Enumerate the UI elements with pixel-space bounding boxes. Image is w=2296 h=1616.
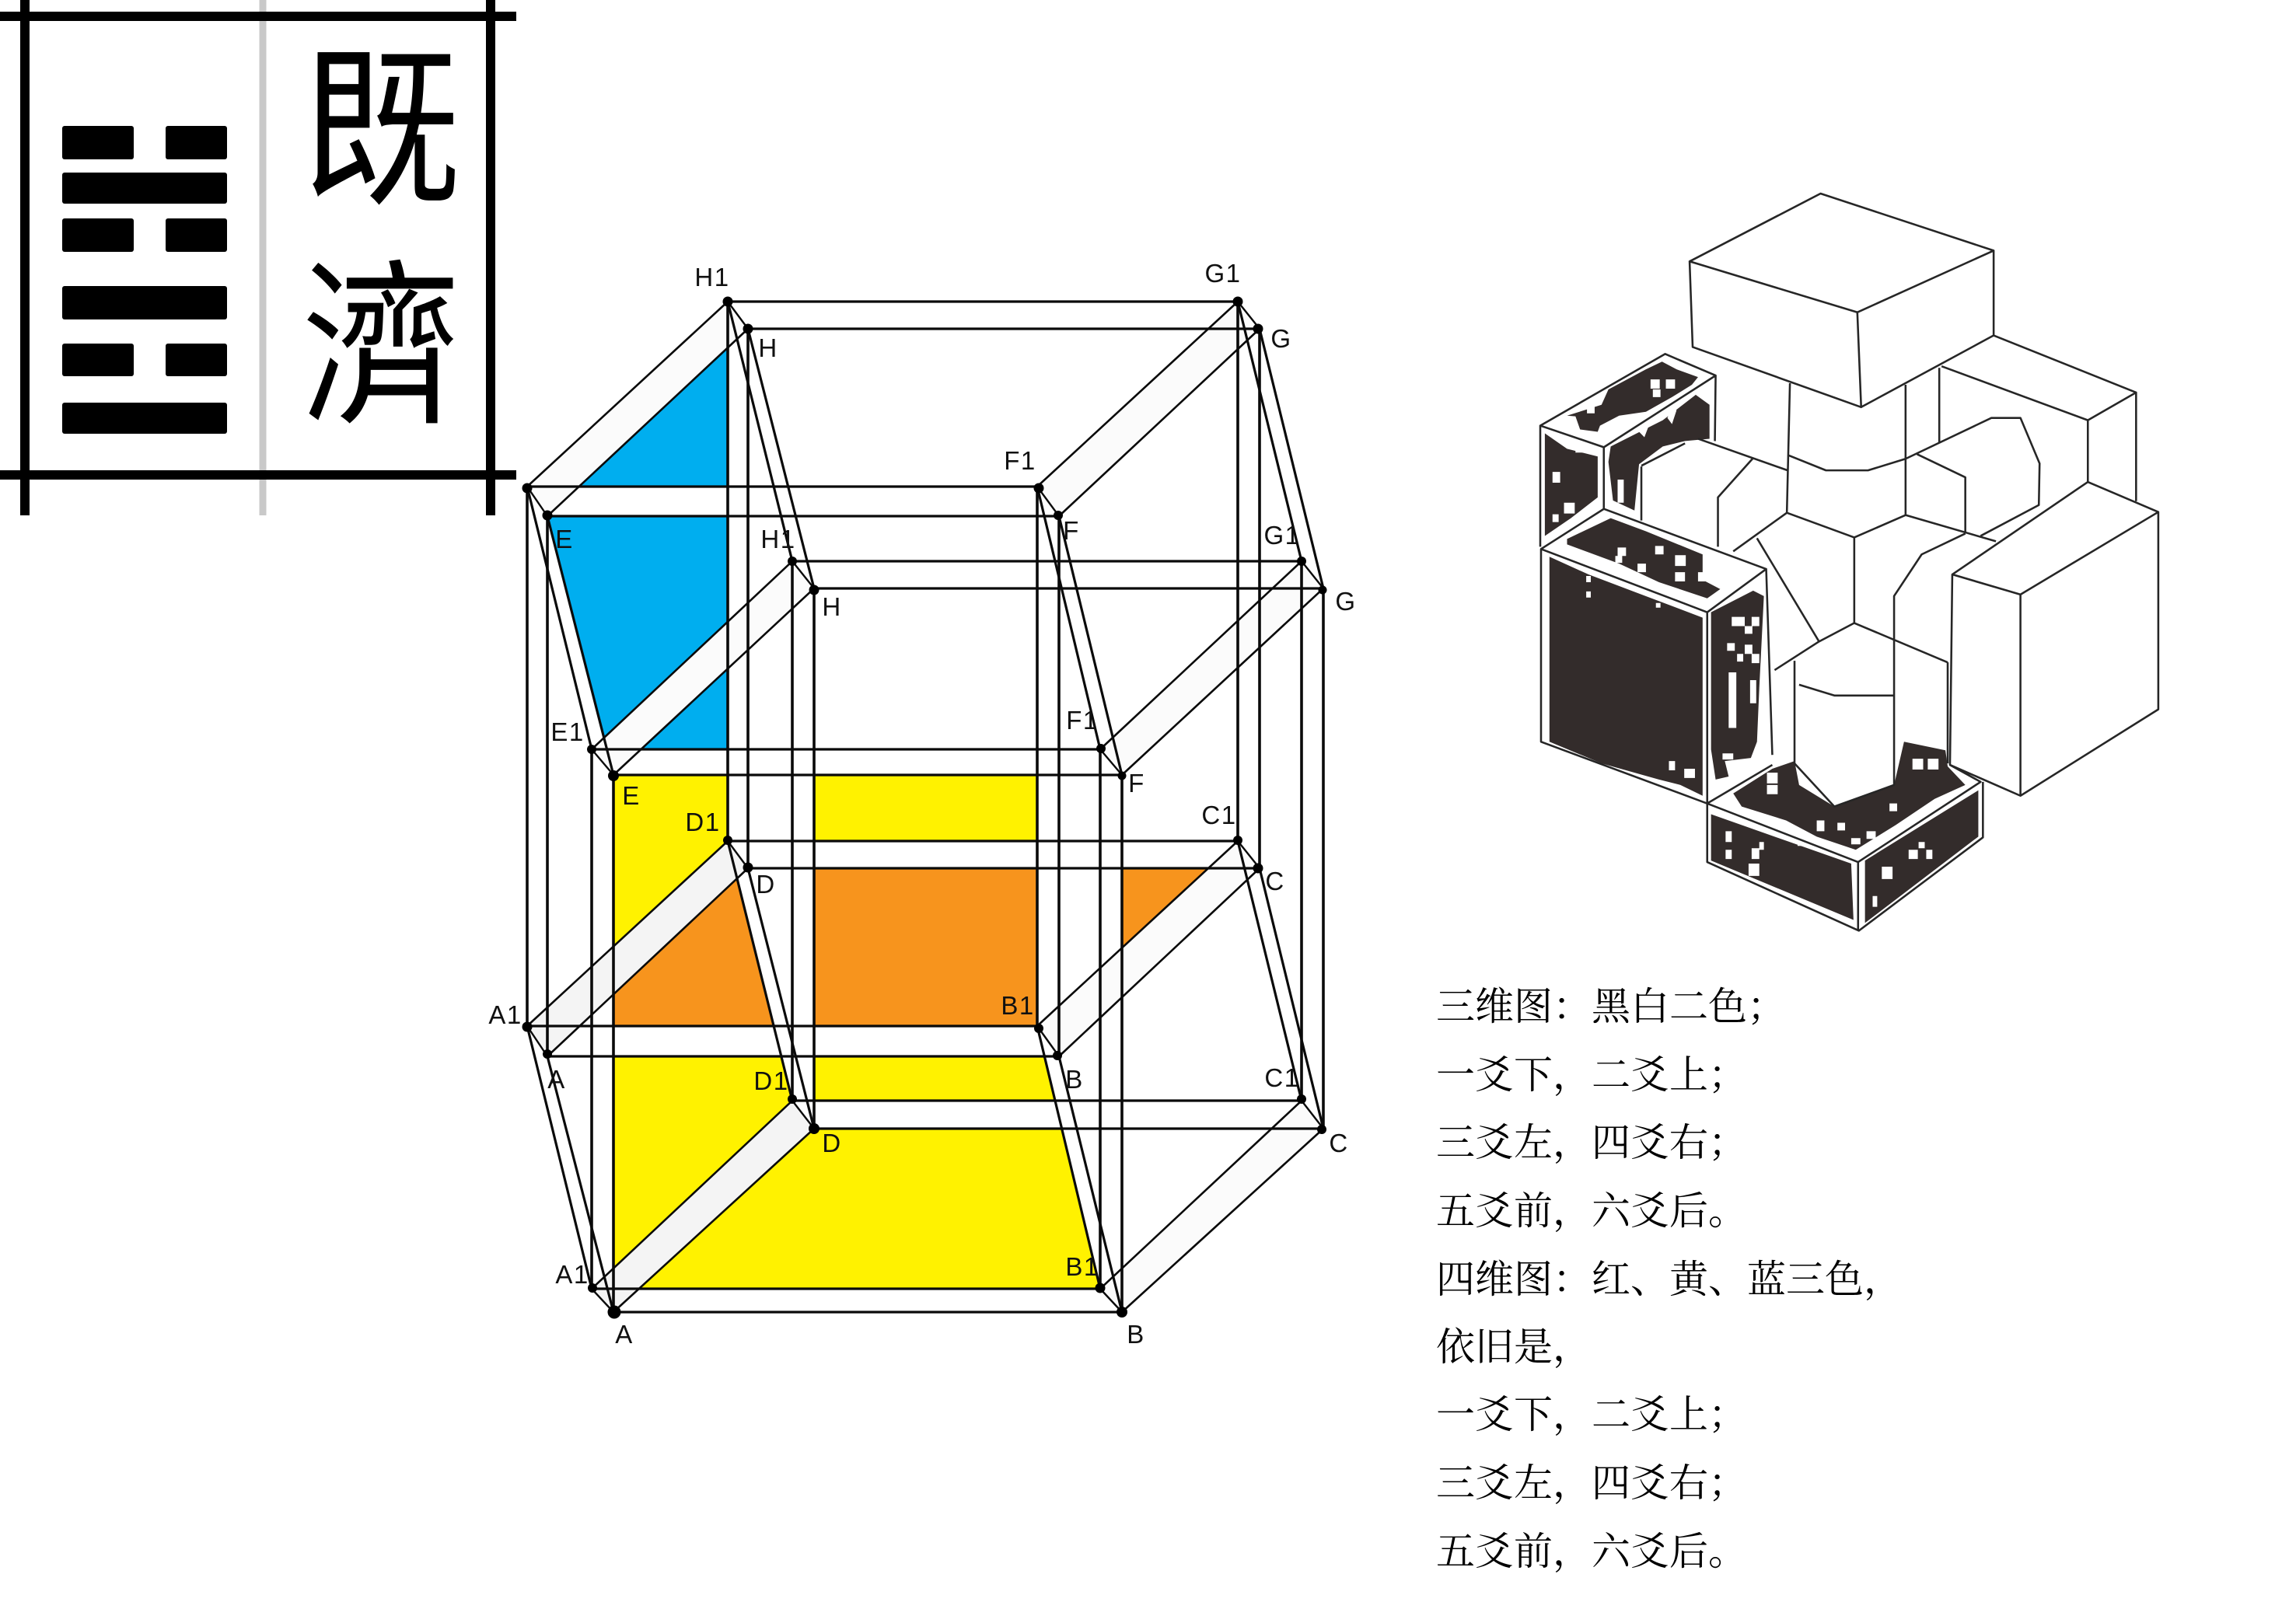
text block: explanation of 3D and 4D figures: 四维图：红、黄、蓝三色，: [1436, 1258, 1903, 1301]
text block: explanation of 3D and 4D figures: 依旧是，: [1436, 1325, 1592, 1369]
vertex labels: E: [555, 525, 574, 553]
wireframe edges: [527, 302, 1323, 1312]
vertex labels: D: [822, 1129, 842, 1157]
chart: hypercube wireframe with coloured faces: [488, 259, 1357, 1349]
vertex labels: F: [1063, 516, 1080, 545]
heading: hexagram name: [302, 30, 462, 446]
text block: explanation of 3D and 4D figures: 一爻下，二爻上；: [1436, 1393, 1747, 1436]
panel: hexagram table cell: [0, 0, 516, 515]
face: yellow: [613, 775, 1100, 1289]
vertex labels: B: [1127, 1320, 1145, 1349]
chart: three-dimensional black and white block figure: [1540, 194, 2158, 930]
text block: explanation of 3D and 4D figures: 一爻下，二爻上；: [1436, 1053, 1747, 1097]
vertex labels: D1: [685, 808, 721, 836]
black textured faces: [1545, 361, 1978, 923]
text block: explanation of 3D and 4D figures: 五爻前，六爻后。: [1436, 1189, 1747, 1233]
vertex labels: C: [1329, 1129, 1349, 1157]
vertex labels: G: [1335, 587, 1357, 616]
icon: hexagram Ji Ji six lines: [62, 126, 227, 434]
heading: hexagram name: 濟: [302, 250, 462, 446]
vertex labels: D1: [753, 1066, 789, 1095]
heading: hexagram name: 既: [302, 30, 462, 227]
text block: explanation of 3D and 4D figures: [1436, 985, 1903, 1573]
text block: explanation of 3D and 4D figures: 三维图：黑白二色；: [1436, 985, 1786, 1028]
vertex labels: C: [1265, 867, 1285, 895]
vertex labels: F: [1128, 769, 1145, 798]
face: orange: [613, 868, 1208, 1026]
text block: explanation of 3D and 4D figures: 三爻左，四爻右；: [1436, 1121, 1747, 1164]
white speckles in black faces: [1553, 379, 1938, 907]
vertex labels: C1: [1201, 801, 1237, 829]
vertex dots: [522, 297, 1326, 1318]
vertex labels: D: [756, 870, 776, 899]
vertex labels: F1: [1004, 446, 1036, 475]
vertex labels: A1: [488, 1000, 522, 1029]
vertex labels: E: [622, 781, 641, 810]
vertex labels: B1: [1001, 991, 1035, 1020]
outlines of blocks and connecting pillars: [1540, 194, 2158, 930]
vertex labels: G: [1270, 324, 1292, 353]
vertex labels: H1: [694, 263, 730, 291]
vertex labels: H: [758, 333, 778, 362]
vertex labels: C1: [1264, 1063, 1300, 1092]
face: blue: [547, 347, 728, 749]
vertex labels: A: [615, 1320, 634, 1349]
vertex labels: B: [1065, 1065, 1084, 1094]
vertex labels: H1: [760, 525, 796, 553]
vertex labels: G1: [1263, 521, 1301, 550]
vertex labels: B1: [1065, 1252, 1099, 1281]
vertex labels: G1: [1204, 259, 1242, 288]
vertex labels: H: [822, 592, 842, 621]
vertex labels: A1: [555, 1260, 589, 1289]
vertex labels: A: [547, 1065, 566, 1094]
vertex labels: F1: [1066, 706, 1099, 735]
text block: explanation of 3D and 4D figures: 三爻左，四爻右；: [1436, 1461, 1747, 1505]
vertex labels: [488, 259, 1357, 1349]
text block: explanation of 3D and 4D figures: 五爻前，六爻后。: [1436, 1530, 1747, 1573]
vertex labels: E1: [550, 717, 585, 746]
